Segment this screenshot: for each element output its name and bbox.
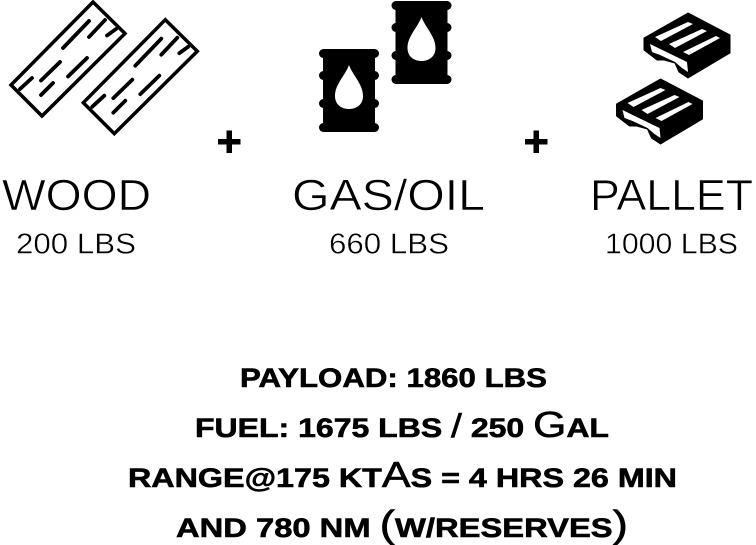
summary: range: RANGE@175 KT AS = 4 HRS 26 MIN bbox=[128, 454, 677, 495]
icon: wood planks bbox=[11, 2, 197, 134]
label: pallet: PALLET bbox=[590, 171, 753, 220]
label: pallet weight: 1000 LBS bbox=[605, 228, 738, 260]
plus sign: gas and pallet bbox=[525, 130, 548, 153]
icon: pallets bbox=[616, 13, 730, 144]
label: gas/oil: GAS/OIL bbox=[292, 171, 485, 220]
icon: oil barrels bbox=[319, 1, 452, 132]
label: wood weight: 200 LBS bbox=[16, 228, 136, 260]
summary: distance: AND 780 NM (W/RESERVES ) bbox=[176, 504, 628, 545]
plus sign: wood and gas bbox=[218, 130, 240, 153]
summary: payload: PAYLOAD: 1860 LBS bbox=[240, 363, 547, 393]
label: gas/oil weight: 660 LBS bbox=[329, 228, 449, 260]
summary: fuel: FUEL: 1675 LBS / 250 GAL bbox=[195, 404, 609, 445]
label: wood: WOOD bbox=[2, 171, 151, 220]
